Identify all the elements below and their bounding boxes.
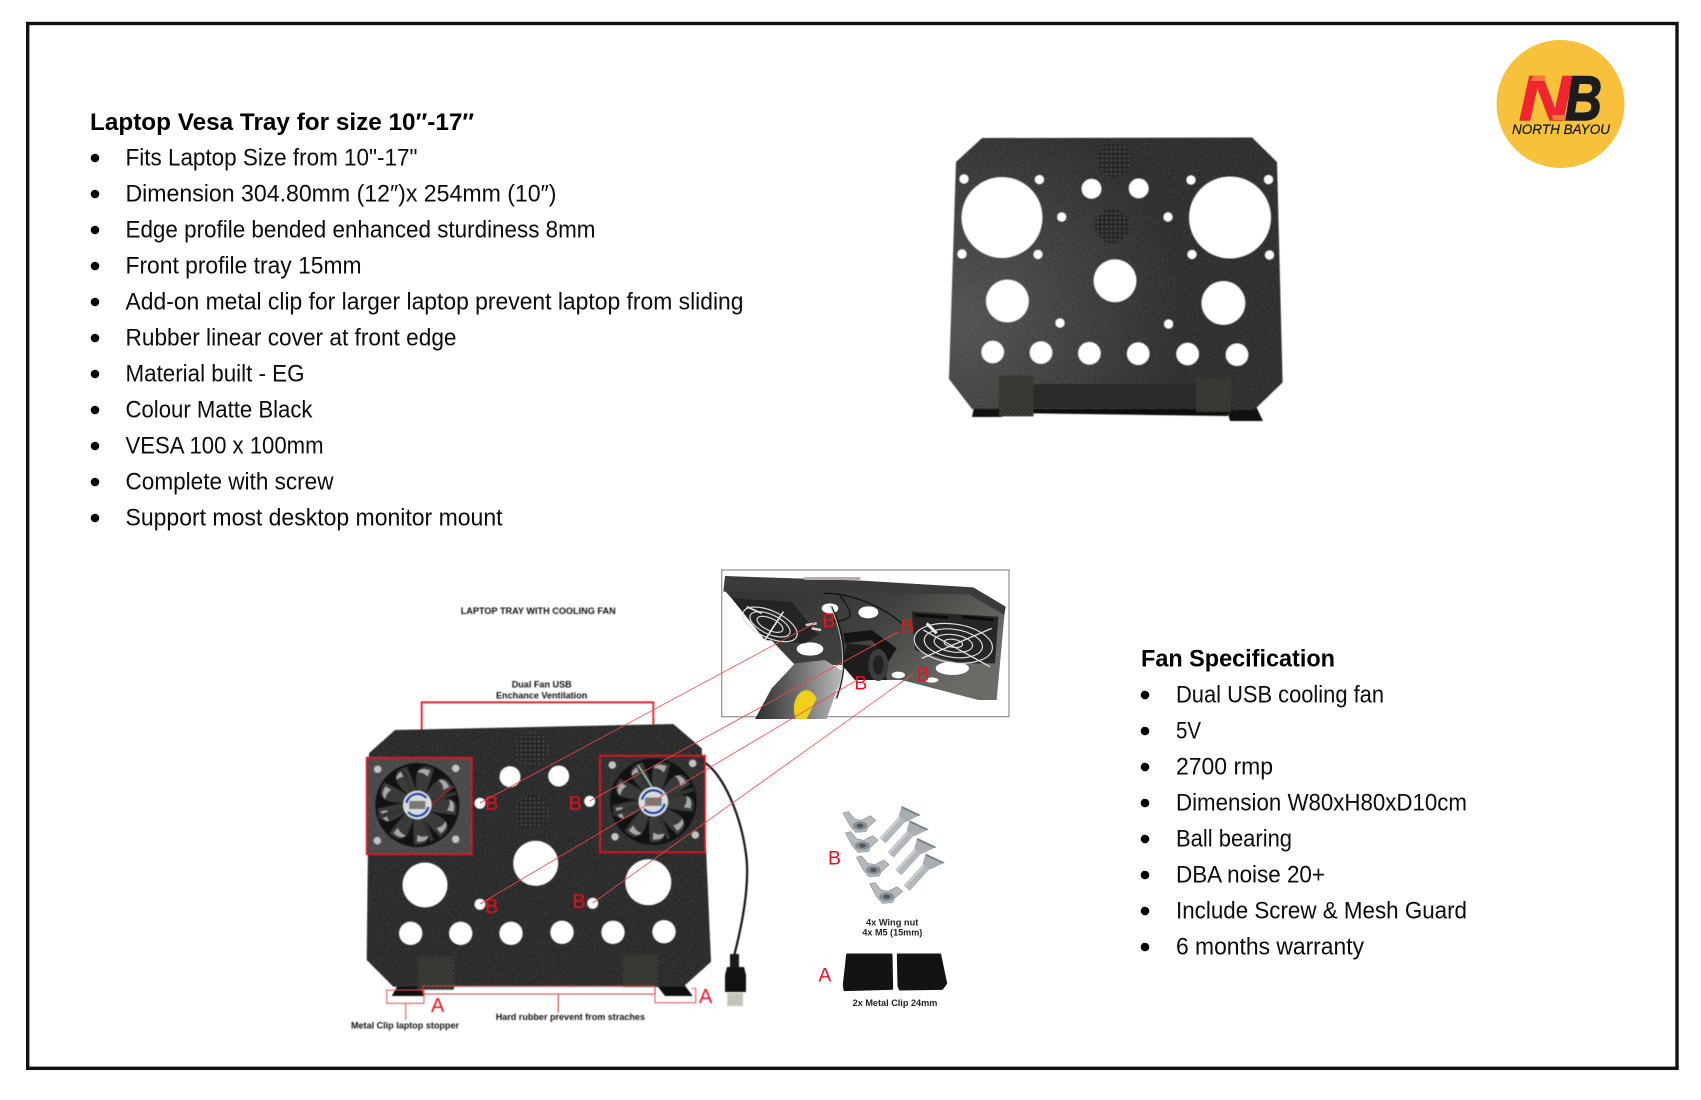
diagram title: LAPTOP TRAY WITH COOLING FAN bbox=[461, 606, 616, 617]
bullet list: fan features: Dual USB cooling fan bbox=[1176, 682, 1384, 709]
bullet list: tray features: Edge profile bended enhanced sturdiness 8mm bbox=[126, 216, 596, 244]
annotated tray diagram with cooling fans bbox=[351, 606, 747, 1032]
screw position markers on tray: B bbox=[485, 896, 498, 918]
bullet list: tray features: Rubber linear cover at front edge bbox=[126, 324, 456, 352]
caption bbox=[862, 918, 922, 938]
bullet list: fan features: DBA noise 20+ bbox=[1176, 862, 1325, 889]
bullet list: fan features: 6 months warranty bbox=[1176, 934, 1364, 961]
screw markers B: B bbox=[901, 617, 914, 638]
tray top edge bbox=[723, 576, 1006, 615]
screw position markers on tray: B bbox=[485, 793, 498, 815]
right fan with guard bbox=[912, 612, 998, 668]
screw position markers on tray: B bbox=[572, 891, 586, 913]
wing nuts bbox=[843, 812, 902, 903]
callout: hard rubber bbox=[423, 986, 655, 1023]
photo: tray mounted on arm, underside view bbox=[722, 570, 1009, 719]
bullet list: tray features: Fits Laptop Size from 10"-17" bbox=[126, 144, 418, 172]
mesh vents bbox=[514, 732, 549, 767]
callout: metal clip stopper: Metal Clip laptop stopper bbox=[351, 1020, 459, 1032]
callout: metal clip right bbox=[655, 986, 713, 1008]
plate holes bbox=[399, 766, 676, 945]
cooling fan left bbox=[374, 762, 462, 849]
photo frame bbox=[722, 570, 1009, 717]
tray feet bbox=[972, 402, 1263, 421]
bullet list: tray features: Front profile tray 15mm bbox=[126, 252, 362, 280]
bullet list: fan features bbox=[1141, 682, 1467, 961]
bullet list: tray features: Material built - EG bbox=[126, 360, 304, 388]
screw position markers on tray: B bbox=[568, 793, 582, 815]
bullet list: tray features: Add-on metal clip for larger laptop prevent laptop from sliding bbox=[126, 288, 744, 316]
hardware: wing nuts and screws bbox=[828, 806, 945, 938]
label B: B bbox=[828, 849, 841, 870]
caption: 4x Wing nut bbox=[866, 918, 918, 928]
underside of tray bbox=[723, 589, 1005, 700]
cooling fan right bbox=[608, 757, 699, 847]
bolts bbox=[881, 806, 945, 888]
screw markers B: B bbox=[854, 673, 867, 694]
bullet list: fan features: Dimension W80xH80xD10cm bbox=[1176, 790, 1467, 817]
mesh vents bbox=[1097, 143, 1131, 177]
label A: A bbox=[818, 966, 831, 987]
heading: laptop vesa tray: Laptop Vesa Tray for size 10″-17″ bbox=[90, 109, 475, 136]
rubber pads bbox=[418, 957, 454, 990]
screw markers B: B bbox=[917, 665, 930, 686]
tray feet bbox=[392, 983, 693, 996]
fan mount panels bbox=[367, 758, 472, 854]
rubber pads bbox=[999, 375, 1034, 416]
callout: metal clip right: A bbox=[699, 986, 713, 1008]
front lip bbox=[1033, 384, 1197, 408]
plate holes bbox=[957, 174, 1274, 366]
bullet list: fan features: 5V bbox=[1176, 718, 1201, 745]
logo: north bayou: N bbox=[1519, 64, 1573, 134]
caption: 4x M5 (15mm) bbox=[862, 928, 922, 938]
bullet list: fan features: Include Screw & Mesh Guard bbox=[1176, 898, 1467, 925]
clip pair bbox=[844, 955, 946, 990]
screw markers B bbox=[822, 611, 930, 694]
bullet list: tray features: Support most desktop monitor mount bbox=[126, 504, 503, 532]
bullet list: tray features: VESA 100 x 100mm bbox=[126, 432, 324, 460]
callout: metal clip stopper bbox=[351, 990, 459, 1032]
screw position markers on tray bbox=[480, 623, 913, 918]
tray plate bbox=[367, 724, 711, 987]
usb cable bbox=[703, 762, 747, 1006]
bullet list: tray features bbox=[91, 144, 743, 532]
hardware: metal clips bbox=[818, 955, 946, 1008]
leader lines bbox=[480, 623, 913, 904]
logo: north bayou: B bbox=[1565, 64, 1602, 134]
bullet list: tray features: Colour Matte Black bbox=[126, 396, 313, 424]
bullet list: fan features: 2700 rmp bbox=[1176, 754, 1273, 781]
photo: plain black vesa tray bbox=[949, 138, 1283, 421]
fan highlight boxes bbox=[367, 758, 472, 854]
heading: fan specification: Fan Specification bbox=[1141, 646, 1335, 673]
left fan with guard bbox=[732, 598, 821, 649]
mount arm bbox=[755, 593, 902, 719]
tray plate bbox=[949, 138, 1283, 410]
callout: dual fan bbox=[422, 680, 653, 758]
logo: north bayou bbox=[1496, 40, 1624, 168]
callout: metal clip stopper: A bbox=[431, 995, 445, 1017]
callout: hard rubber: Hard rubber prevent from straches bbox=[496, 1012, 645, 1023]
callout: dual fan: Dual Fan USB bbox=[512, 680, 572, 690]
bullet list: tray features: Complete with screw bbox=[126, 468, 334, 496]
callout: dual fan: Enchance Ventilation bbox=[496, 690, 587, 702]
screw markers B: B bbox=[822, 611, 835, 632]
caption: 2x Metal Clip 24mm bbox=[853, 998, 937, 1008]
logo: north bayou: NORTH BAYOU bbox=[1512, 122, 1610, 137]
bullet list: tray features: Dimension 304.80mm (12″)x 254mm (10″) bbox=[126, 180, 556, 208]
text block: laptop vesa tray specification bbox=[90, 109, 744, 532]
text block: fan specification bbox=[1141, 646, 1467, 961]
tray cutouts bbox=[797, 603, 969, 683]
bullet list: fan features: Ball bearing bbox=[1176, 826, 1292, 853]
